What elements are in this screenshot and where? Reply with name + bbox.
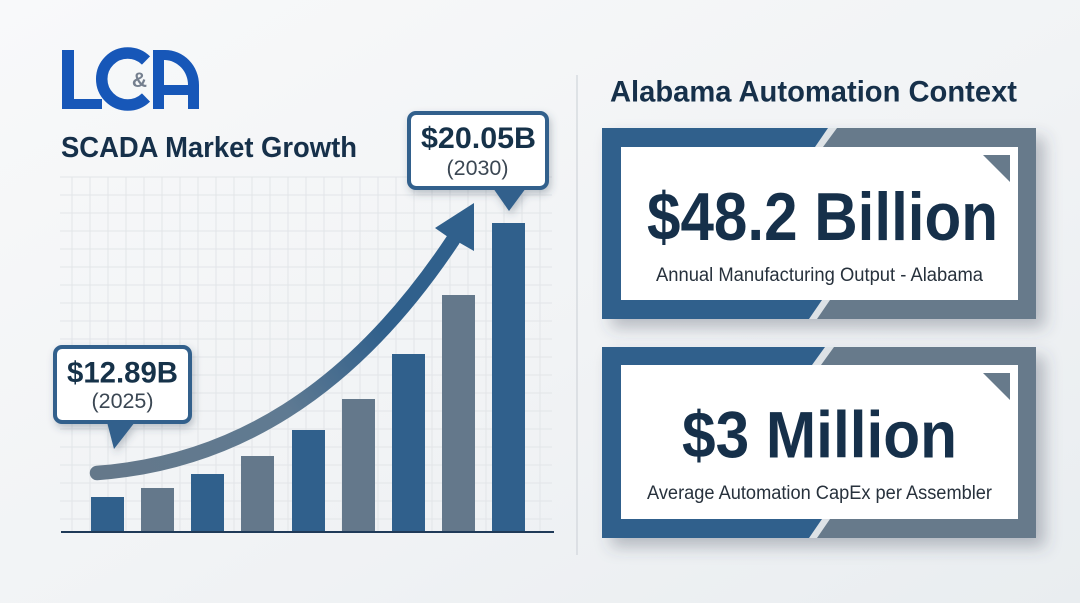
- callout: 2025 value: $12.89B: [67, 356, 178, 390]
- panel: automation capex: [602, 347, 1036, 538]
- heading: SCADA Market Growth: SCADA Market Growth: [61, 132, 357, 164]
- caption: Annual Manufacturing Output - Alabama: [656, 265, 983, 286]
- corner triangle: [983, 373, 1010, 400]
- callout: 2030 value: (2030): [446, 157, 508, 180]
- heading: Alabama Automation Context: Alabama Automation Context: [610, 76, 1017, 108]
- corner triangle: [983, 155, 1010, 182]
- caption: Average Automation CapEx per Assembler: [647, 483, 993, 504]
- logo: LC&A: &: [132, 69, 147, 92]
- callout: 2025 value: (2025): [92, 390, 154, 413]
- value: $3 Million: [682, 398, 957, 472]
- callout: 2030 value: [409, 113, 547, 211]
- axis baseline: [61, 531, 554, 533]
- callout: 2025 value: [55, 347, 190, 449]
- growth arrow: [97, 203, 474, 473]
- value: $48.2 Billion: [647, 179, 998, 255]
- panel: manufacturing output: [602, 128, 1036, 319]
- callout: 2030 value: $20.05B: [421, 122, 536, 155]
- logo: LC&A: [62, 50, 199, 109]
- bars: [91, 223, 525, 532]
- chart: market growth: [60, 177, 554, 533]
